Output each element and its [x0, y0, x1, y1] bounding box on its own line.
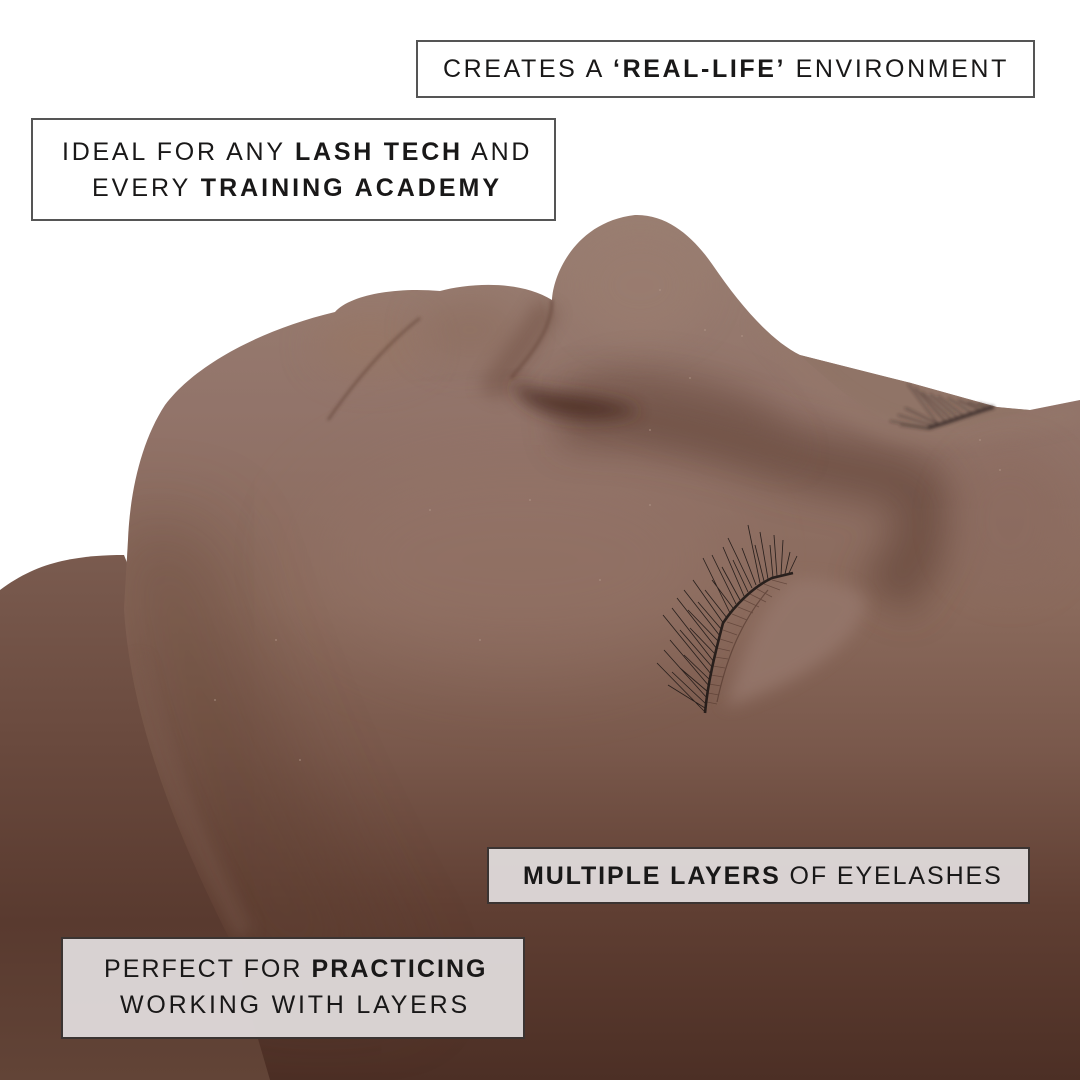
- jaw rim light: [214, 880, 244, 929]
- far eye lashes: [890, 384, 994, 429]
- callout: perfect for practicing: [61, 937, 525, 1039]
- neck and shoulder: [0, 555, 300, 1080]
- lips light: [315, 315, 425, 375]
- eyelid: [725, 578, 866, 706]
- callout: real-life environment: [416, 40, 1035, 98]
- far eye region: [800, 355, 1028, 410]
- callout: ideal for any lash tech: [31, 118, 556, 221]
- skin speckles: [214, 289, 1001, 761]
- cheek glow: [310, 450, 730, 670]
- callout: multiple layers: MULTIPLE LAYERS OF EYELASHES: [523, 862, 1003, 890]
- callout: perfect for practicing: PERFECT FOR PRACTICING: [104, 955, 488, 983]
- bridge ridge highlight: [758, 322, 802, 356]
- left cheek falloff: [124, 516, 265, 790]
- nose side shading: [614, 366, 751, 410]
- face: [100, 215, 1080, 1080]
- callout: ideal for any lash tech: EVERY TRAINING ACADEMY: [92, 174, 502, 202]
- near eye lashes: [657, 525, 797, 713]
- callout: multiple layers: [487, 847, 1030, 904]
- nose top light: [575, 230, 705, 340]
- callout: perfect for practicing: WORKING WITH LAYERS: [120, 991, 470, 1019]
- callout: ideal for any lash tech: IDEAL FOR ANY LASH TECH AND: [62, 138, 532, 166]
- nostril shadow: [511, 382, 640, 418]
- right cheek light: [950, 450, 1070, 590]
- callout: real-life environment: CREATES A ‘REAL-LIFE’ ENVIRONMENT: [443, 55, 1009, 83]
- mouth line: [328, 318, 420, 420]
- shadow under nose to eye socket: [560, 415, 925, 600]
- nose wing edge: [511, 300, 552, 378]
- near eye lash band: [707, 580, 787, 704]
